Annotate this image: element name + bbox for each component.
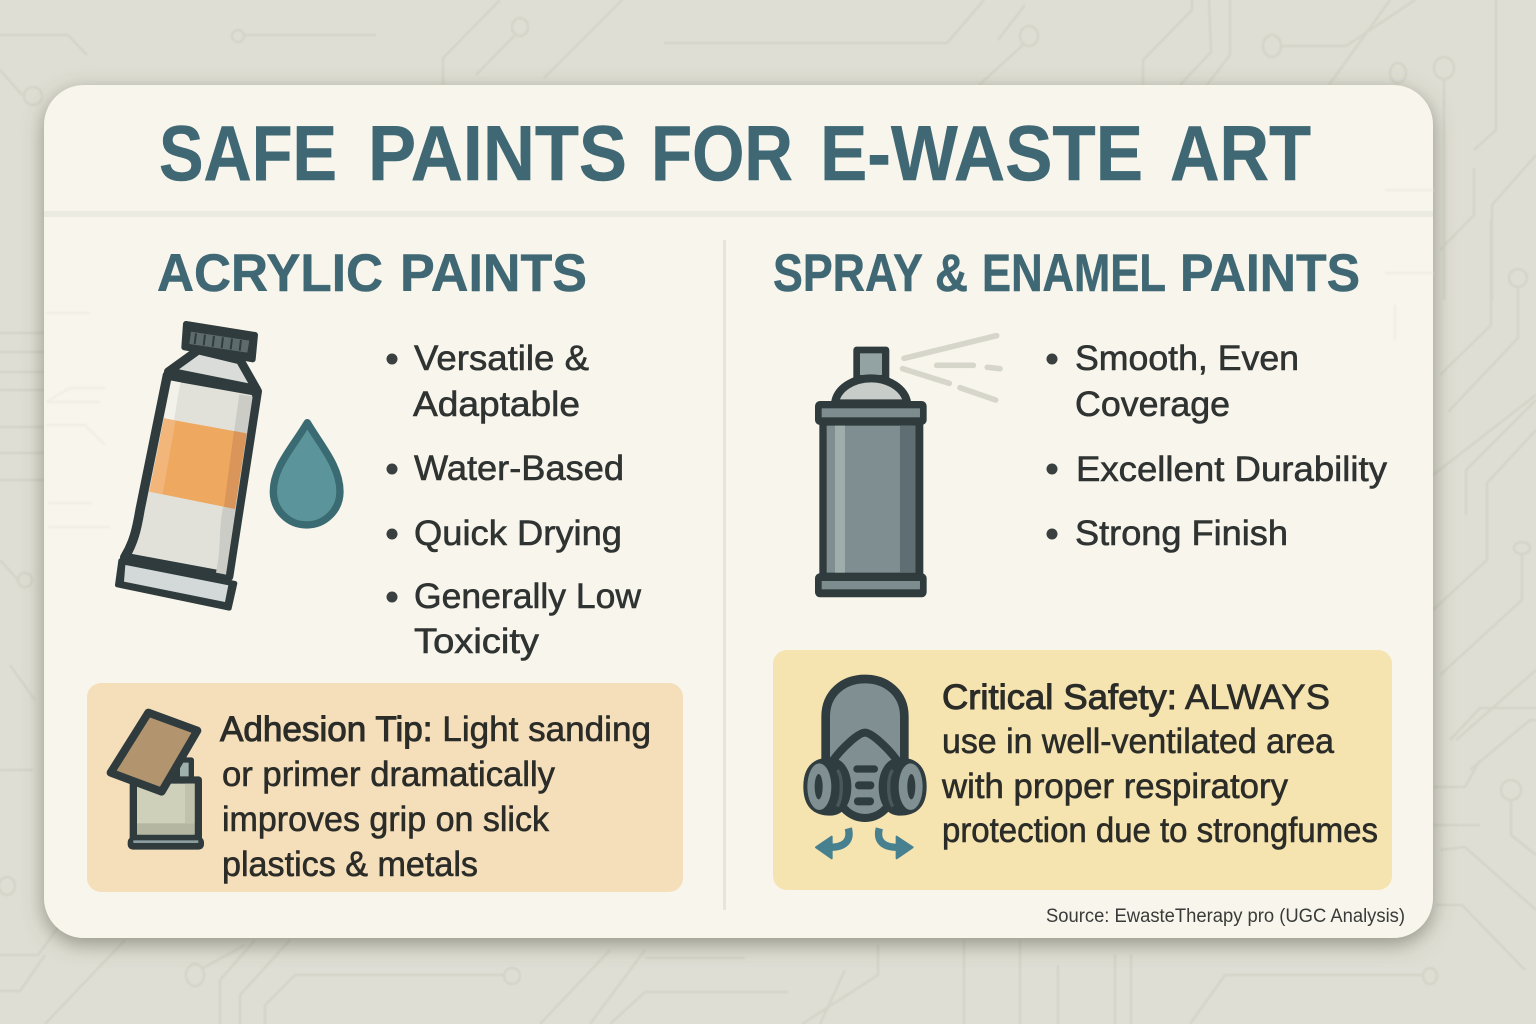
heading: spray and enamel paints — [773, 244, 1360, 303]
heading: spray and enamel paints: ENAMEL — [982, 244, 1166, 303]
heading: acrylic paints: PAINTS — [400, 244, 587, 303]
faint circuit traces showing through card — [46, 190, 1433, 527]
icon: sandpaper and primer can — [111, 713, 204, 850]
title: PAINTS — [368, 109, 627, 197]
heading: acrylic paints — [157, 244, 587, 303]
panel: critical safety — [773, 650, 1392, 890]
title: SAFE — [159, 109, 337, 197]
source note: Source: EwasteTherapy pro (UGC Analysis) — [1046, 906, 1405, 927]
list: spray paint properties: Coverage — [1075, 385, 1230, 424]
icon: respirator mask with arrows — [803, 679, 927, 858]
text: adhesion tip: plastics & metals — [222, 845, 478, 884]
divider: under title — [44, 211, 1433, 217]
icon: water drop — [273, 423, 340, 525]
title — [159, 109, 1311, 197]
text: adhesion tip: or primer dramatically — [222, 755, 555, 794]
list: spray paint properties: Strong Finish — [1075, 514, 1288, 553]
list: spray paint properties: Excellent Durability — [1076, 450, 1388, 489]
list: acrylic paint properties: Adaptable — [413, 385, 580, 424]
icon: paint tube — [117, 324, 257, 608]
panel: main card — [44, 85, 1433, 938]
list: acrylic paint properties: Water-Based — [414, 449, 624, 488]
text: adhesion tip: Adhesion Tip: Light sanding — [220, 710, 651, 749]
list: acrylic paint properties — [386, 339, 642, 661]
list: acrylic paint properties: Quick Drying — [414, 514, 622, 553]
title: E-WASTE — [820, 109, 1143, 197]
text: adhesion tip — [220, 710, 651, 884]
list: spray paint properties: Smooth, Even — [1075, 339, 1299, 378]
heading: spray and enamel paints: PAINTS — [1180, 244, 1360, 303]
heading: spray and enamel paints: & — [935, 244, 968, 303]
title: FOR — [651, 109, 793, 197]
text: critical safety: with proper respiratory — [941, 767, 1288, 806]
title: ART — [1170, 109, 1311, 197]
icon: spray can — [815, 336, 1000, 597]
panel: adhesion tip — [87, 683, 683, 892]
text: critical safety: Critical Safety: ALWAYS — [942, 678, 1330, 717]
divider: between columns — [723, 240, 726, 910]
list: acrylic paint properties: Toxicity — [414, 622, 540, 661]
heading: spray and enamel paints: SPRAY — [773, 244, 923, 303]
heading: acrylic paints: ACRYLIC — [157, 244, 383, 303]
list: spray paint properties — [1046, 339, 1388, 553]
text: critical safety — [941, 678, 1378, 850]
text: critical safety: protection due to strongfumes — [942, 811, 1378, 850]
text: adhesion tip: improves grip on slick — [222, 800, 549, 839]
list: acrylic paint properties: Versatile & — [414, 339, 589, 378]
list: acrylic paint properties: Generally Low — [414, 577, 642, 616]
text: critical safety: use in well-ventilated area — [942, 722, 1335, 761]
